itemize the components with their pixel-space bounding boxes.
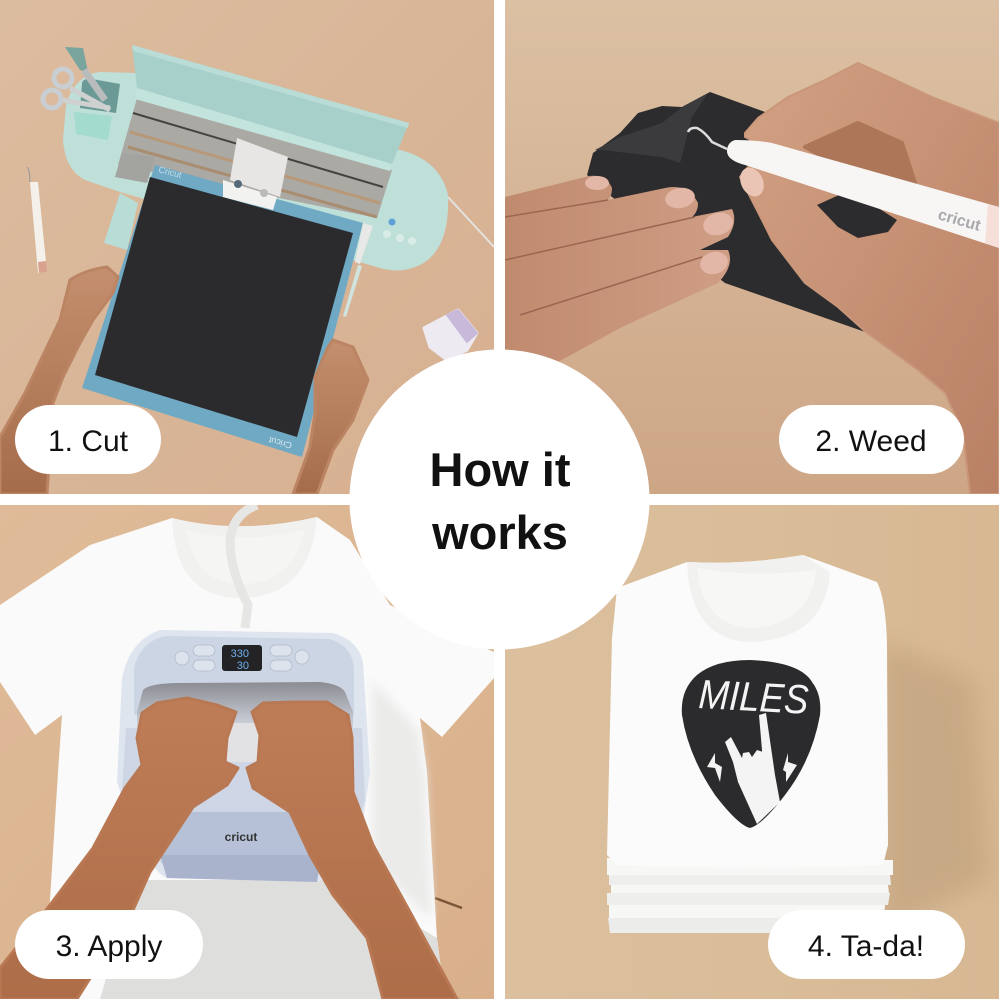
hand left	[0, 267, 118, 494]
right side clamp	[355, 223, 373, 264]
top folded t-shirt	[607, 555, 888, 868]
label: 1. Cut	[15, 405, 161, 474]
power cable	[448, 197, 494, 247]
vinyl peeled flap	[595, 93, 708, 163]
icon: rock hand	[725, 713, 780, 824]
panel: step 1 cut	[0, 0, 494, 494]
carriage	[223, 138, 288, 210]
panel: step 2 weed	[505, 0, 999, 494]
weeding pen	[727, 140, 999, 248]
label: 4. Ta-da!: 4. Ta-da!	[808, 930, 924, 963]
mint tray	[104, 193, 138, 250]
right shirt shading	[372, 680, 432, 920]
heat press: cricut	[225, 830, 257, 844]
right side strip	[343, 265, 362, 317]
cutting mat: Cricut	[267, 435, 293, 451]
miles lettering: MILES	[698, 671, 810, 723]
scissors and tools in holder	[43, 47, 110, 110]
panel: step 3 apply	[0, 505, 494, 999]
left hand fingers	[505, 176, 735, 362]
heading: works	[431, 506, 568, 559]
shirt lower shadow	[100, 880, 445, 999]
icon: right lightning bolt	[783, 753, 797, 782]
wood knot	[435, 898, 462, 908]
hand right	[293, 340, 368, 494]
right hand	[736, 63, 999, 494]
heat press cable	[230, 505, 257, 628]
shirt shadow	[884, 650, 987, 910]
label: 2. Weed	[779, 405, 964, 474]
black vinyl sheet	[587, 92, 868, 333]
label: 3. Apply	[15, 910, 203, 979]
label: 4. Ta-da!	[768, 910, 965, 979]
cutting machine	[63, 45, 448, 270]
t-shirt	[0, 517, 494, 999]
vinyl lobe between thumb and pen	[817, 196, 897, 238]
small heat press device	[424, 310, 477, 360]
cutting mat: Cricut	[157, 164, 183, 180]
stack of folded shirts	[607, 858, 893, 933]
heading: How it	[430, 443, 571, 496]
heat press: 30	[237, 660, 249, 672]
center circle	[350, 350, 650, 650]
cutting mat	[82, 164, 363, 457]
left hand and arm	[0, 698, 238, 999]
t-shirt collar	[687, 555, 830, 642]
right hand and arm	[247, 702, 457, 999]
guitar pick graphic	[682, 660, 820, 828]
t-shirt collar	[172, 517, 317, 598]
weeding pen: cricut	[936, 207, 983, 235]
weeding tool	[27, 167, 47, 273]
panel: step 4 ta-da	[505, 505, 999, 999]
label: 3. Apply: 3. Apply	[56, 930, 162, 963]
heat press	[117, 630, 370, 882]
left side clamp	[115, 165, 150, 183]
heat press: 330	[231, 648, 249, 660]
weeding hook	[688, 128, 727, 149]
label: 1. Cut: 1. Cut	[48, 425, 129, 458]
label: 2. Weed: 2. Weed	[815, 425, 927, 458]
icon: left lightning bolt	[707, 753, 722, 782]
